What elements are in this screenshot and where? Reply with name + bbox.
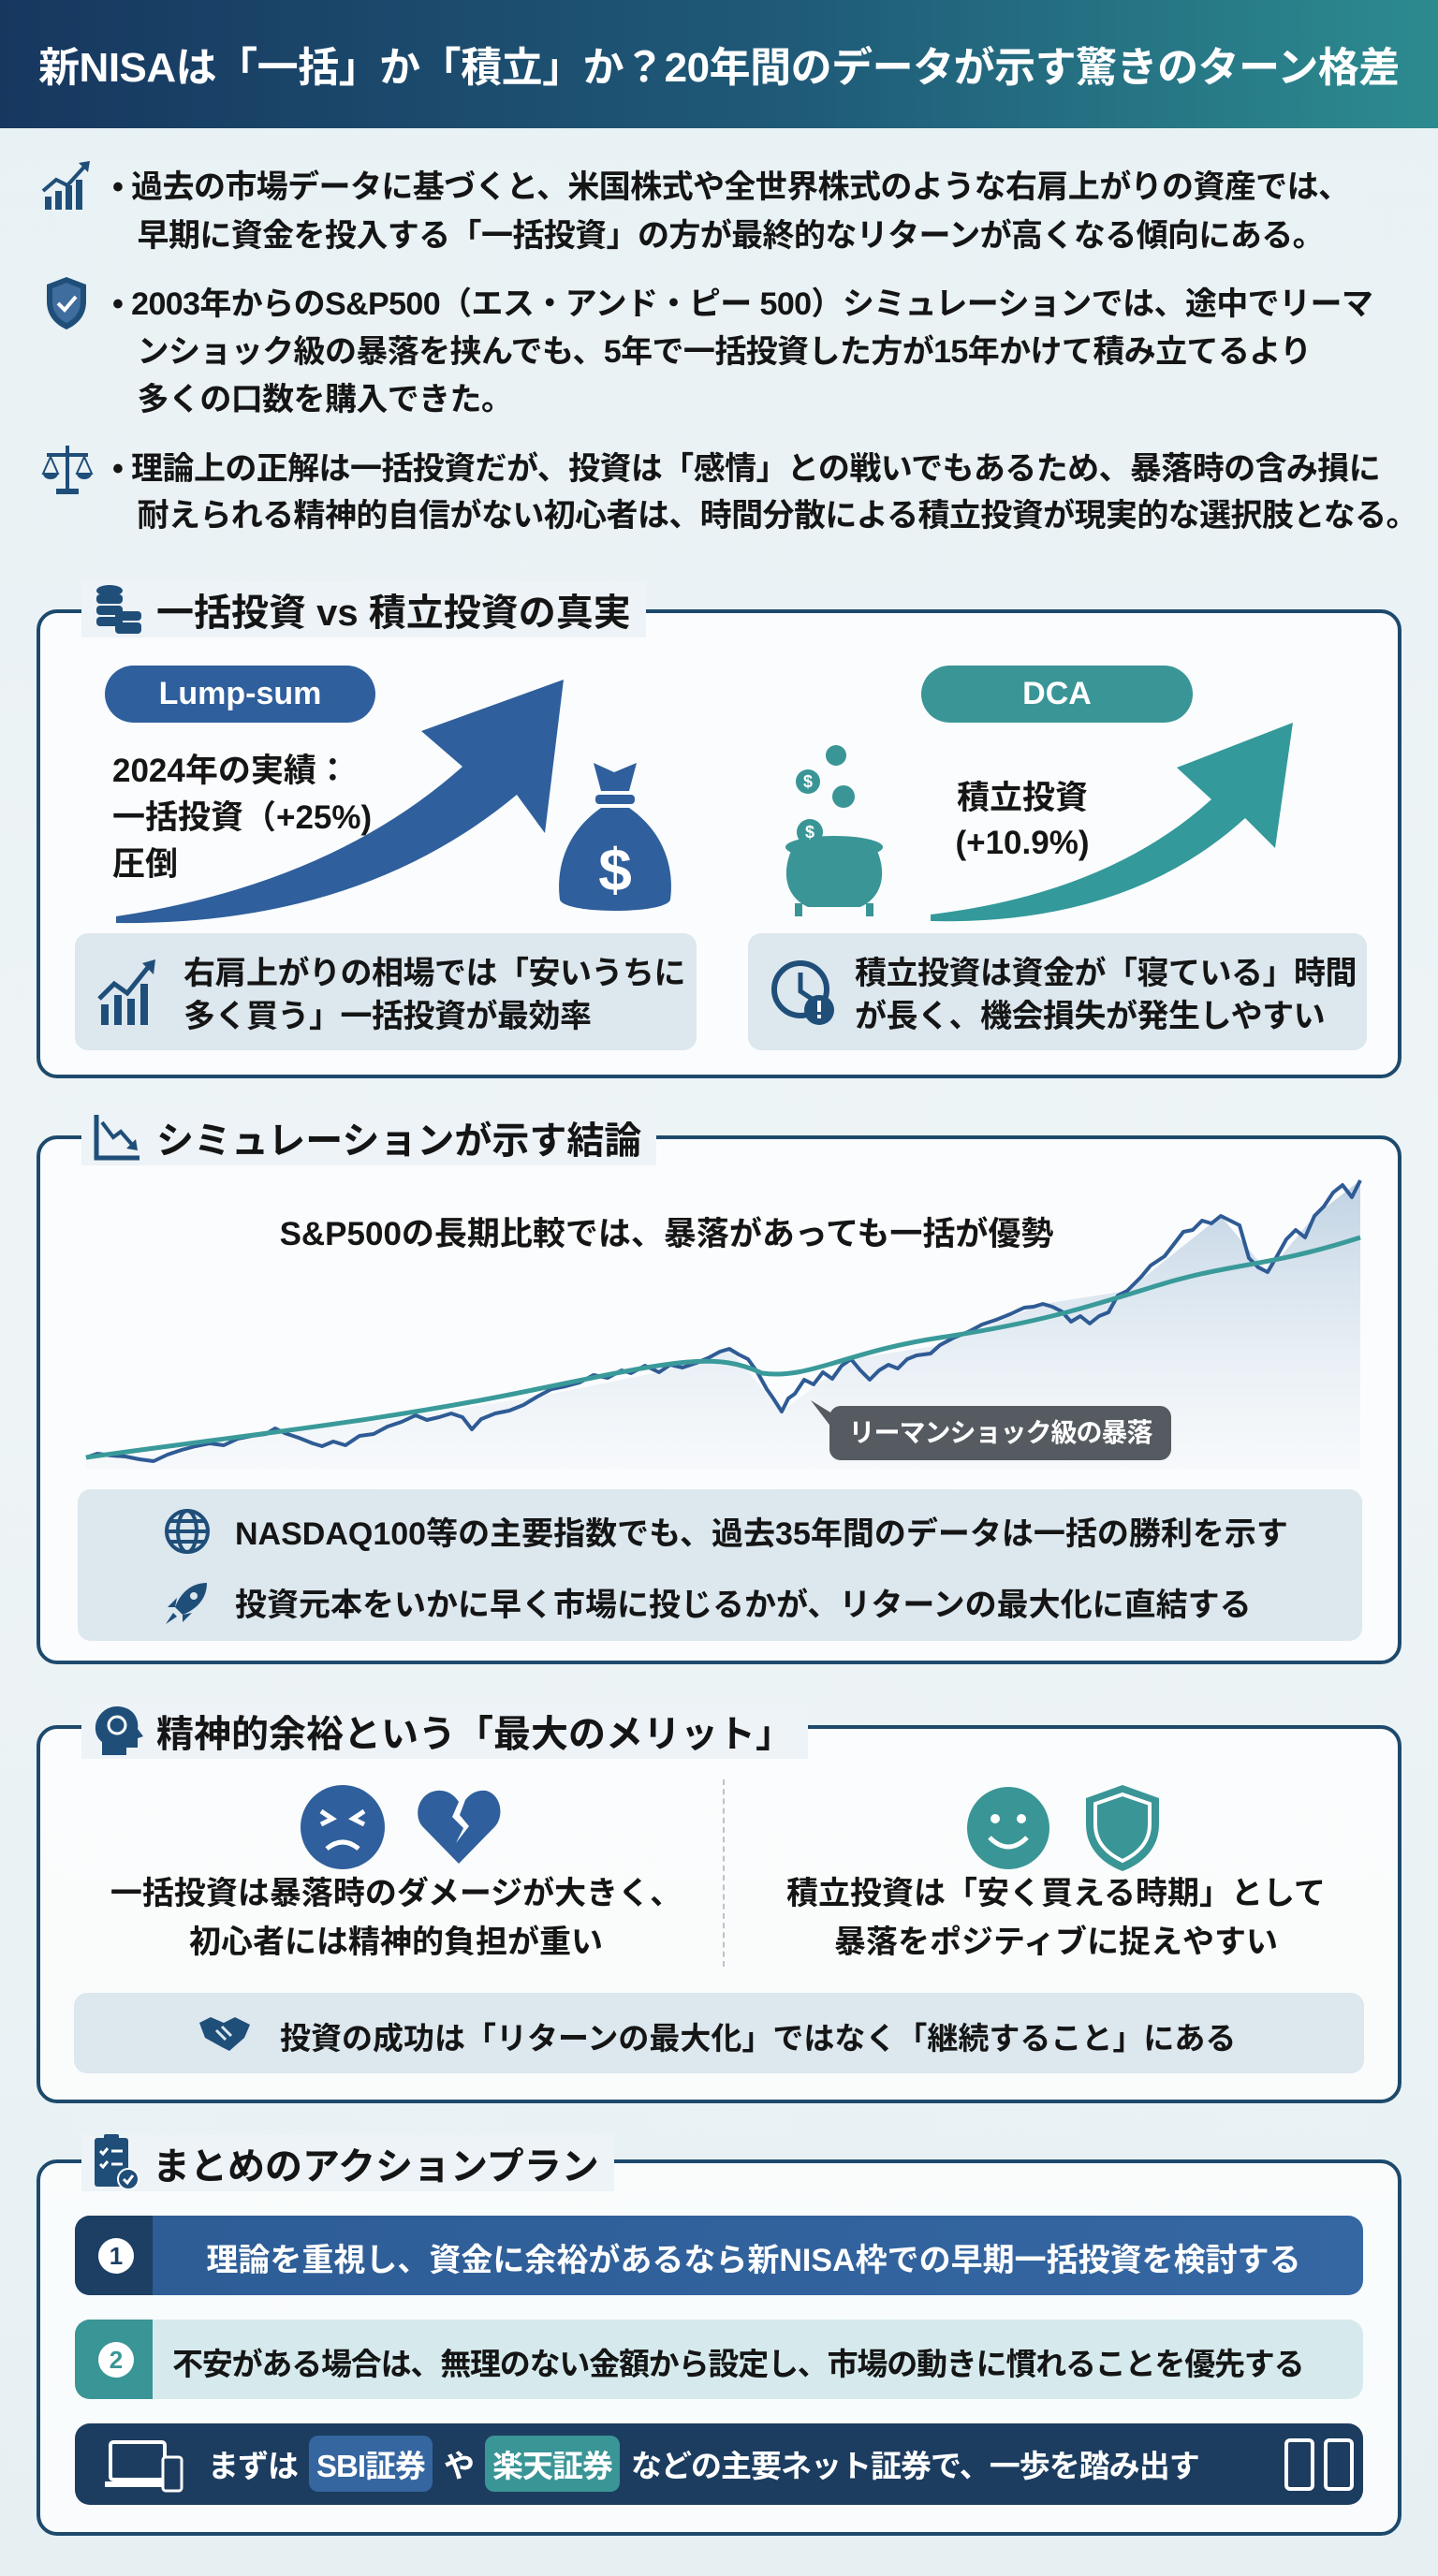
- text: NASDAQ: NASDAQ100等の主要指数でも、過去35年間のデータは一括の勝利を示す: [235, 1516, 1288, 1552]
- heading: [81, 581, 646, 637]
- callout box: DCA: [748, 933, 1367, 1050]
- icon: coin pot: $: [803, 772, 813, 791]
- text: DCA positive: 暴落をポジティブに捉えやすい: [834, 1925, 1278, 1960]
- icon: money bag: $: [598, 836, 632, 903]
- callout: Lehman crash: [829, 1406, 1171, 1460]
- heading: 一括投資 vs 積立投資の真実: [156, 593, 631, 634]
- info box: [78, 1489, 1362, 1641]
- text: lump-sum damage: 初心者には精神的負担が重い: [189, 1925, 603, 1960]
- icon: globe: [165, 1509, 210, 1554]
- text with broker pills: などの主要ネット証券で、一歩を踏み出す: [631, 2449, 1199, 2483]
- icon: head: [95, 1706, 143, 1755]
- text: DCA positive: [786, 1876, 1326, 1960]
- header banner: [0, 0, 1438, 128]
- text: early investment: 投資元本をいかに早く市場に投じるかが、リターンの最大化に直結する: [235, 1588, 1252, 1623]
- text: 投資の成功は「リターンの最大化」ではなく「継続すること」にある: [280, 2021, 1236, 2056]
- bullet 2 text: [112, 286, 1372, 417]
- icon: chart down: [94, 1115, 139, 1161]
- pill: DCA: DCA: [1022, 676, 1092, 711]
- number 2: [98, 2342, 134, 2378]
- icon: handshake: [199, 2017, 250, 2051]
- text: 理論を重視し、資金に余裕があるなら新NISA枠での早期一括投資を検討する: [206, 2243, 1301, 2278]
- heading: まとめのアクションプラン: [153, 2146, 599, 2188]
- callout: Lehman crash: リーマンショック級の暴落: [848, 1418, 1152, 1447]
- pill: Rakuten: [485, 2436, 620, 2492]
- bullet 2 text: ンショック級の暴落を挟んでも、5年で一括投資した方が15年かけて積み立てるより: [138, 334, 1311, 370]
- pill: Lump-sum: [105, 666, 375, 723]
- bottom callout: [74, 1993, 1364, 2073]
- icon: checklist: [95, 2134, 139, 2190]
- callout box: lump-sum: [75, 933, 697, 1050]
- text: が長く、機会損失が発生しやすい: [855, 999, 1325, 1034]
- text: lump-sum result: [112, 753, 372, 883]
- text: lump-sum damage: [110, 1876, 682, 1960]
- icon: phones: [1284, 2438, 1354, 2491]
- step 3: [75, 2423, 1363, 2505]
- text: lump-sum result: 2024年の実績：: [112, 753, 349, 789]
- panel: mental margin: [37, 1725, 1401, 2103]
- heading: [81, 1703, 808, 1759]
- title: 新NISAは「一括」か「積立」か？20年間のデータが示す驚きのターン格差: [38, 45, 1400, 91]
- heading: [81, 2135, 614, 2191]
- bullet 3 text: 耐えられる精神的自信がない初心者は、時間分散による積立投資が現実的な選択肢となる。: [138, 498, 1417, 534]
- text: lump-sum result: 一括投資（+25%): [112, 799, 372, 836]
- bullet 2 text: 多くの口数を購入できた。: [138, 382, 512, 417]
- text: 積立投資は資金が「寝ている」時間: [855, 956, 1357, 991]
- icon: smile: [967, 1787, 1049, 1869]
- icon: laptop: [105, 2440, 183, 2492]
- pill: DCA: [921, 666, 1193, 723]
- text with broker pills: や: [444, 2449, 474, 2483]
- text with broker pills: まずは: [208, 2449, 298, 2483]
- text: DCA result: (+10.9%): [955, 825, 1090, 861]
- icon: shield: [47, 277, 86, 329]
- bullet 3 text: • 理論上の正解は一括投資だが、投資は「感情」との戦いでもあるため、暴落時の含み損に: [112, 451, 1380, 487]
- text: DCA positive: 積立投資は「安く買える時期」として: [786, 1876, 1326, 1911]
- icon: coin pot: $: [805, 823, 814, 842]
- icon: money bag: [559, 763, 671, 911]
- arrow: lump-sum: [116, 680, 564, 923]
- heading: 精神的余裕という「最大のメリット」: [156, 1714, 793, 1755]
- text: [855, 956, 1357, 1034]
- icon: clock alert: [771, 960, 834, 1025]
- number 1: [98, 2238, 134, 2274]
- text: 右肩上がりの相場では「安いうちに: [183, 956, 685, 991]
- icon: chart up: [41, 161, 90, 210]
- panel: lump-sum vs DCA: [37, 609, 1401, 1078]
- bullet 1 text: [112, 169, 1349, 254]
- pill: Rakuten: 楽天証券: [492, 2449, 612, 2483]
- number 1: 1: [110, 2242, 123, 2270]
- bullet 3 text: [112, 451, 1417, 534]
- icon: coins: [96, 585, 141, 634]
- text: lump-sum result: 圧倒: [112, 846, 178, 883]
- line chart: [85, 1179, 1362, 1463]
- step 2: [75, 2320, 1363, 2399]
- text: [183, 956, 685, 1034]
- text: DCA result: [955, 780, 1090, 861]
- text with broker pills: [208, 2436, 1199, 2492]
- step 1: [75, 2216, 1363, 2295]
- text: 多く買う」一括投資が最効率: [183, 999, 592, 1034]
- bullet 2 text: • 2003年からのS&P500（エス・アンド・ピー 500）シミュレーションでは、途中でリーマ: [112, 286, 1372, 322]
- icon: scales: [41, 446, 94, 494]
- bullet 1 text: 早期に資金を投入する「一括投資」の方が最終的なリターンが高くなる傾向にある。: [138, 218, 1324, 254]
- icon: stressed face: [301, 1785, 385, 1869]
- icon: rocket: [166, 1583, 207, 1624]
- number 2: 2: [110, 2346, 123, 2374]
- bullet list: [41, 161, 1417, 534]
- pill: Lump-sum: Lump-sum: [159, 676, 321, 711]
- icon: shield teal: [1086, 1785, 1159, 1871]
- divider: [723, 1779, 725, 1967]
- pill: SBI: [309, 2436, 433, 2492]
- text: lump-sum damage: 一括投資は暴落時のダメージが大きく、: [110, 1876, 682, 1911]
- text: 不安がある場合は、無理のない金額から設定し、市場の動きに慣れることを優先する: [172, 2347, 1303, 2381]
- icon: broken heart: [418, 1790, 500, 1864]
- panel: simulation: [37, 1135, 1401, 1664]
- panel: action plan: [37, 2159, 1401, 2536]
- arrow: DCA: [931, 723, 1293, 921]
- chart subtitle: S&P500の長期比較では、暴落があっても一括が優勢: [280, 1216, 1053, 1252]
- bullet 1 text: • 過去の市場データに基づくと、米国株式や全世界株式のような右肩上がりの資産では、: [112, 169, 1349, 205]
- heading: シミュレーションが示す結論: [156, 1120, 641, 1162]
- heading: [81, 1109, 656, 1165]
- icon: bar chart: [97, 959, 155, 1025]
- icon: coin pot: [785, 745, 883, 916]
- text: DCA result: 積立投資: [957, 780, 1088, 816]
- pill: SBI: SBI証券: [316, 2449, 425, 2483]
